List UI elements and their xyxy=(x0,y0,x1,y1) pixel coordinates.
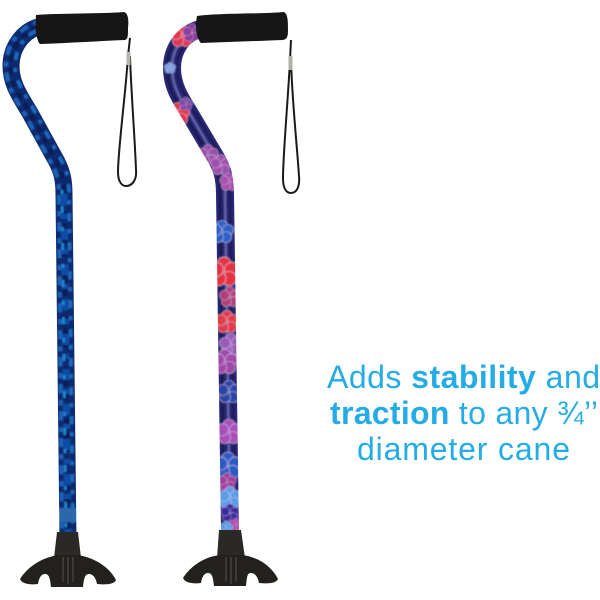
lanyard ferrule xyxy=(288,56,292,70)
foam grip xyxy=(36,12,128,44)
lanyard xyxy=(118,38,136,186)
lanyard ferrule xyxy=(126,52,130,65)
rubber quad foot xyxy=(20,532,116,587)
cane: floral pattern xyxy=(150,12,299,586)
cane: blue pattern xyxy=(0,12,136,587)
caption text xyxy=(327,359,600,467)
foam grip xyxy=(196,12,288,43)
blue shaft xyxy=(2,18,76,532)
caption text: Adds stability and xyxy=(327,359,600,395)
floral shaft xyxy=(163,20,239,530)
caption text: traction to any ¾’’ xyxy=(330,395,598,431)
rubber quad foot xyxy=(183,530,278,586)
caption text: diameter cane xyxy=(357,431,570,467)
lanyard xyxy=(283,40,299,193)
